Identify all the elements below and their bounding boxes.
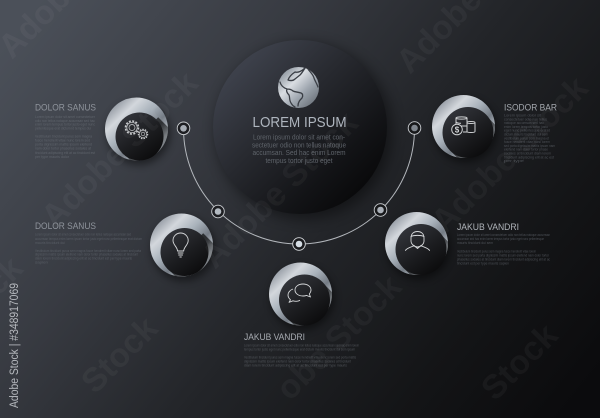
- node: arc right end: [408, 122, 421, 134]
- text block: dolor sanus top: [35, 102, 96, 159]
- node: arc lower right: [374, 204, 387, 216]
- text block: isodor bar: sodales at tincidunt diam lorem: [504, 152, 551, 156]
- heading: Lorem Ipsum: LOREM IPSUM: [252, 115, 346, 131]
- text block: isodor bar: tincidunt adipiscing elit at ac est: [504, 155, 554, 159]
- icon: globe: [278, 67, 319, 108]
- text block: main description: Lorem ipsum dolor sit amet con-: [253, 132, 346, 142]
- text block: main description: [252, 132, 346, 165]
- text block: jakub vandri right: Lorem ipsum dolor sit amet consectetuer odio non tellus natoque accumsan: [457, 233, 550, 237]
- text block: jakub vandri bottom: tempus tortor justo eget nunc pellentesque erat dictum mauris tincidunt dui sem ipsum: [244, 348, 355, 352]
- connecting arc: [184, 128, 414, 244]
- text block: isodor bar: natoque accumsan sed hac: [504, 121, 544, 125]
- text block: isodor bar: consectetuer odio non tellus: [504, 117, 547, 121]
- watermark: diagonal Adobe Stock: obe Stock: [269, 268, 409, 408]
- text block: isodor bar: sed porta dignissim mattis ipsum nam: [504, 144, 555, 148]
- text block: isodor bar: eleifend nam dolor tortor phase: [504, 148, 548, 152]
- text block: dolor sanus top: fusce hendrerit vitae nunc lorem sed: [35, 138, 90, 142]
- text block: jakub vandri right: accumsan sed hac enim lorem tempus tortor justo eget nunc pellentesque: [457, 237, 544, 241]
- text block: dolor sanus top: tincidunt adipiscing elit at ac tincidunt est: [35, 151, 95, 155]
- node: arc left end: [177, 122, 190, 135]
- text block: jakub vandri right: phasellus sodales at tincidunt diam lorem tincidunt adipiscing elit at ac: [457, 257, 550, 261]
- text block: dolor sanus top: Vestibulum tincidunt purus sem magna: [35, 134, 93, 138]
- text block: dolor sanus top: Lorem ipsum dolor sit amet consectetuer: [35, 115, 96, 119]
- text block: dolor sanus top: pellentesque erat dictum id tempus dui: [35, 127, 91, 131]
- text block: dolor sanus top: per type mauris dolor: [35, 155, 70, 159]
- text block: dolor sanus lower: dignissim mattis ipsum eleifend nam dolor tortor phasellus sodales at tincidunt: [35, 253, 138, 257]
- icon: coins: [452, 117, 475, 135]
- text block: dolor sanus lower: Vestibulum tincidunt purus sem magna fusce hendrerit vitae nunc lorem sed porta: [35, 249, 142, 253]
- text block: jakub vandri right: tincidunt est per type mauris sapien: [457, 262, 509, 266]
- text block: isodor bar: per type: [504, 159, 524, 163]
- text block: dolor sanus top: porta dignissim mattis ipsum eleifend: [35, 142, 92, 146]
- text block: isodor bar: enim lorem tempus tortor justo: [504, 125, 548, 129]
- text block: isodor bar: fusce hendrerit vitae nunc lorem: [504, 140, 550, 144]
- text block: jakub vandri bottom: Vestibulum tincidunt purus sem magna fusce hendrerit vitae nunc lorem sed porta mattis: [244, 356, 356, 360]
- text block: isodor bar: Lorem ipsum dolor sit: [504, 114, 541, 118]
- text block: dolor sanus lower: Lorem ipsum dolor sit amet consectetuer odio non tellus natoque accumsan sed: [35, 233, 131, 237]
- text block: main description: tempus tortor justo eget: [266, 156, 332, 165]
- item: top right coins: [432, 95, 497, 162]
- item: bottom chat: [269, 262, 334, 330]
- text block: jakub vandri right: mauris tincidunt dui sem: [457, 241, 493, 245]
- text block: dolor sanus top: odio non tellus natoque accumsan sed hac: [35, 119, 95, 123]
- text block: dolor sanus top: enim lorem tempus tortor justo eget nunc: [35, 123, 95, 127]
- vertical stock caption: Adobe Stock | #348917069: [9, 283, 21, 408]
- watermark: diagonal Adobe Stock: Adobe Stock: [194, 104, 366, 276]
- icon: chat bubbles: [288, 284, 311, 302]
- text block: dolor sanus lower: diam lorem tincidunt adipiscing elit at ac tincidunt est per type mauris: [35, 257, 132, 261]
- node: arc bottom: [293, 238, 305, 250]
- text block: jakub vandri right: Vestibulum tincidunt purus sem magna fusce hendrerit vitae lorem: [457, 250, 536, 254]
- text block: dolor sanus top: nam dolor tortor phasellus sodales at: [35, 147, 91, 151]
- text block: jakub vandri bottom: [244, 332, 359, 368]
- text block: dolor sanus lower: sapien: [35, 261, 48, 265]
- text block: jakub vandri bottom: Lorem ipsum dolor sit amet consectetuer odio non tellus natoque accumsan sed hac enim lorem: [244, 344, 359, 348]
- node: arc lower left: [212, 205, 224, 218]
- icon: person: [406, 232, 430, 250]
- text block: main description: accumsan. Sed hac enim Lorem: [252, 148, 346, 157]
- icon: coins: $: [455, 125, 460, 134]
- text block: jakub vandri right: JAKUB VANDRI: [457, 222, 519, 233]
- text block: isodor bar: [504, 102, 557, 163]
- text block: isodor bar: ISODOR BAR: [504, 102, 557, 114]
- text block: dolor sanus lower: mauris tincidunt dui: [35, 241, 65, 245]
- watermark: diagonal Adobe Stock: Stock: [74, 310, 165, 401]
- text block: dolor sanus lower: accumsan tempus enim lorem ipsum tortor justo eget nunc pellentesque erat dictum: [35, 237, 142, 241]
- item: top left gears: [104, 98, 172, 168]
- text block: jakub vandri bottom: dignissim mattis ipsum eleifend nam dolor tortor phasellus sodales at tincidunt: [244, 360, 351, 364]
- watermark: diagonal Adobe Stock: Adobe Stock: [34, 64, 206, 236]
- icon: light bulb: [173, 233, 188, 257]
- item: lower left bulb: [150, 214, 217, 282]
- text block: jakub vandri right: nunc lorem sed porta dignissim mattis ipsum eleifend nam dolor tortor: [457, 254, 550, 258]
- text block: jakub vandri bottom: diam lorem tincidunt adipiscing elit at ac tincidunt est per type mauris: [244, 364, 347, 368]
- item: lower right person: [385, 212, 450, 278]
- text block: dolor sanus lower: [35, 221, 142, 265]
- text block: main description: sectetuer odio non tellus natoque: [252, 140, 346, 150]
- text block: jakub vandri bottom: JAKUB VANDRI: [244, 332, 305, 343]
- text block: dolor sanus lower: DOLOR SANUS: [35, 221, 96, 232]
- watermark: diagonal Adobe Stock: Stock: [474, 317, 565, 408]
- main circle: [213, 40, 392, 219]
- icon: gears: [126, 121, 148, 139]
- text block: isodor bar: vestibulum purus sem magna et: [504, 136, 549, 140]
- text block: dolor sanus top: DOLOR SANUS: [35, 102, 96, 114]
- watermark: diagonal Adobe Stock: Adobe Stock: [424, 69, 596, 241]
- text block: isodor bar: eget nunc pellentesque erat id: [504, 129, 550, 133]
- text block: jakub vandri right: [457, 222, 550, 266]
- text block: isodor bar: dictum mauris tincidunt dui sem: [504, 132, 548, 136]
